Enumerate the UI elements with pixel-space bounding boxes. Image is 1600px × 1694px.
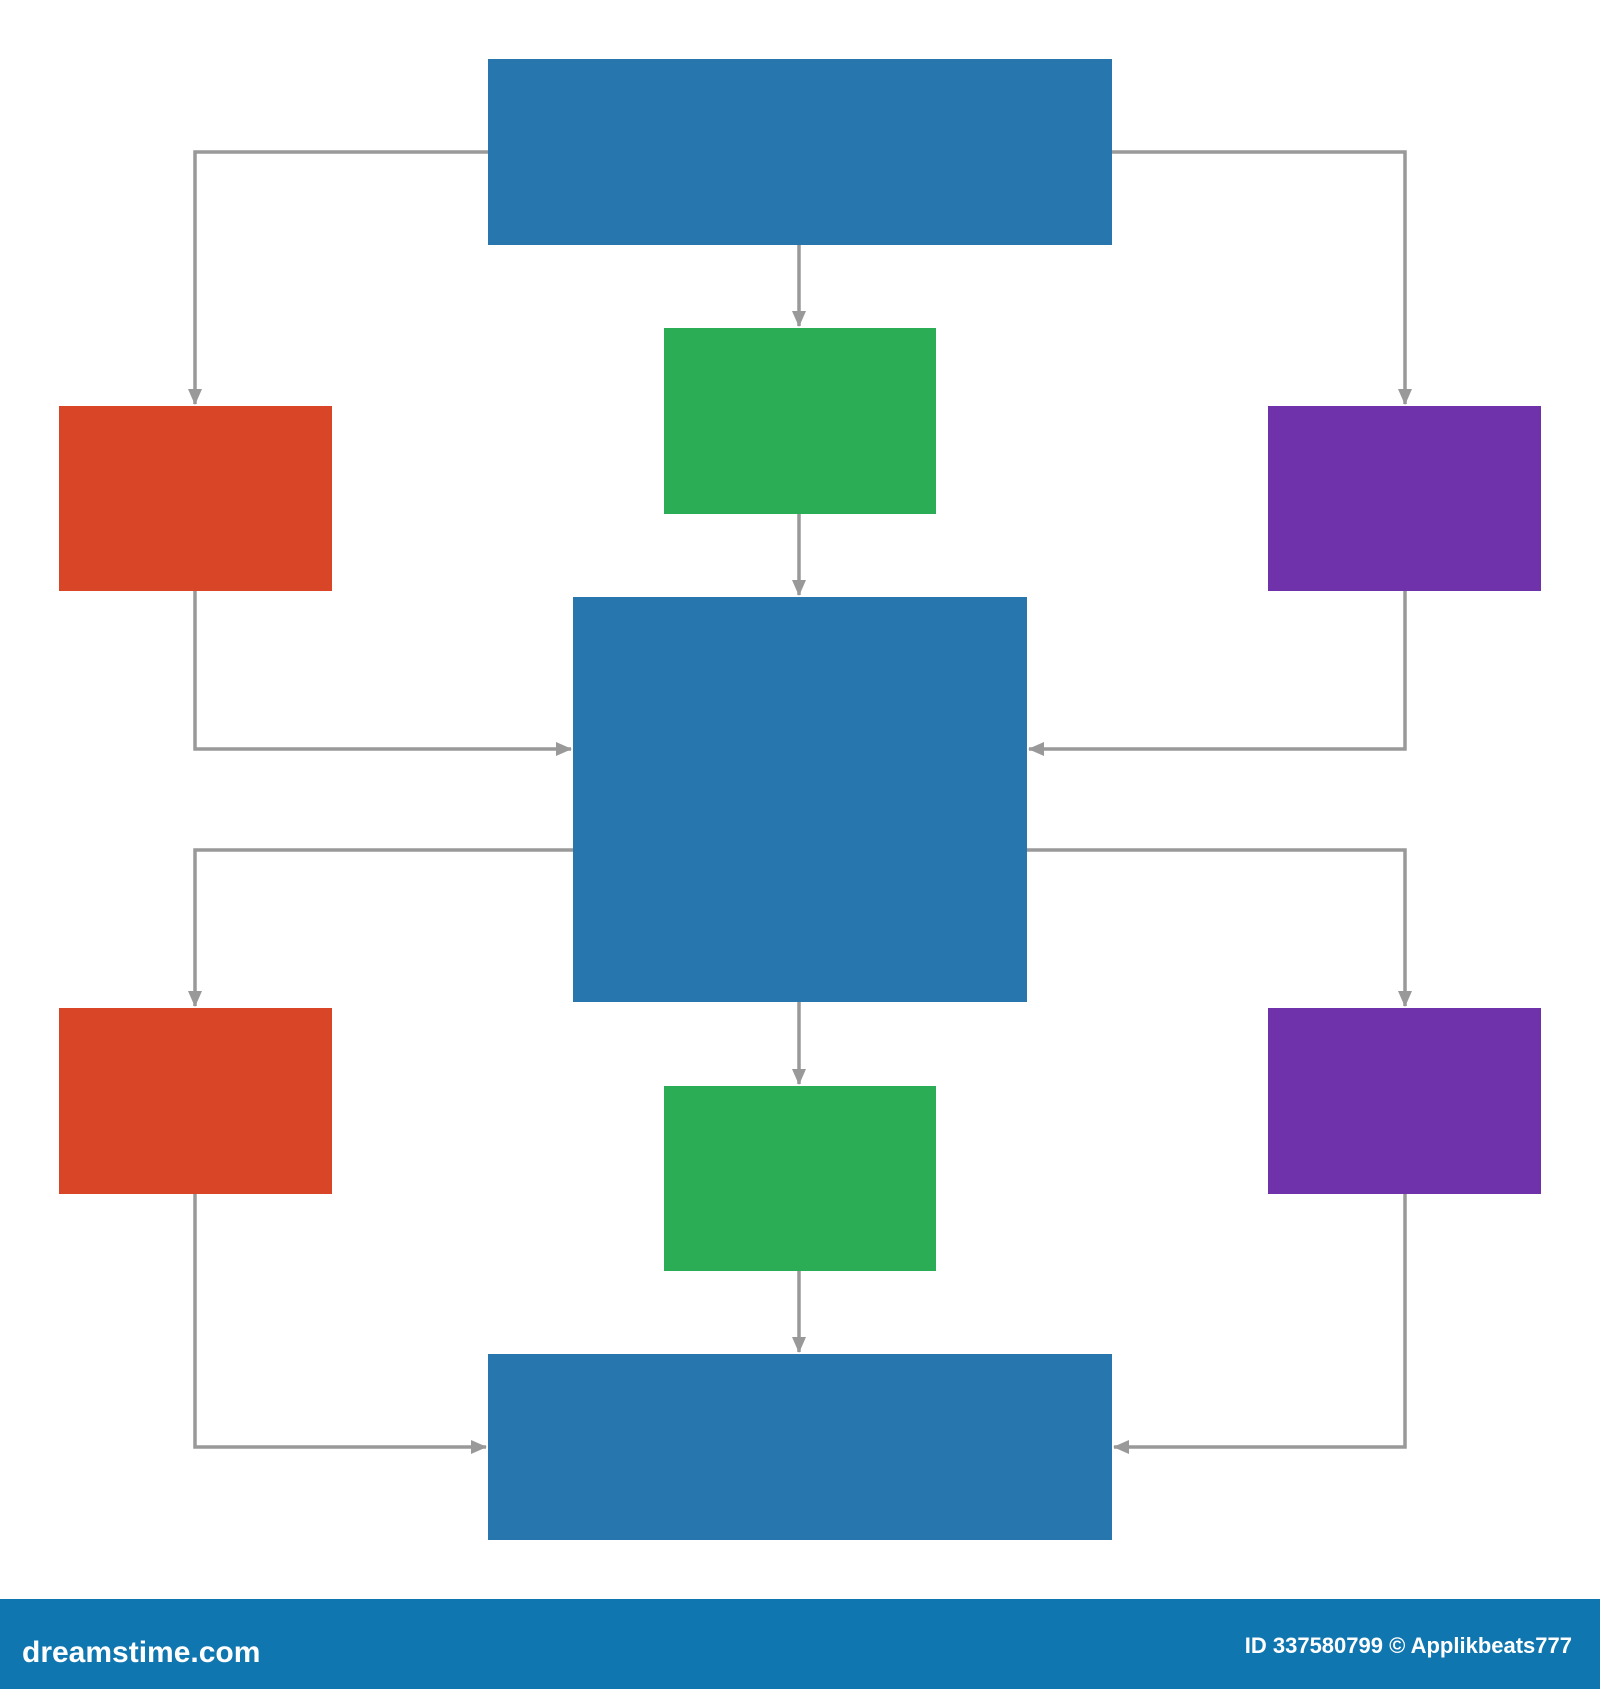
box: purple bottom	[1268, 1008, 1541, 1194]
box: top blue	[488, 59, 1112, 245]
connectors	[195, 152, 1405, 1447]
box: green bottom	[664, 1086, 936, 1271]
box: red bottom	[59, 1008, 332, 1194]
box: bottom blue	[488, 1354, 1112, 1540]
box: center blue	[573, 597, 1027, 1002]
box: red top	[59, 406, 332, 591]
footer: id: ID 337580799 © Applikbeats777	[1245, 1633, 1572, 1658]
box: purple top	[1268, 406, 1541, 591]
box: green top	[664, 328, 936, 514]
footer bar	[0, 1599, 1600, 1689]
footer: site name: dreamstime.com	[22, 1636, 260, 1669]
